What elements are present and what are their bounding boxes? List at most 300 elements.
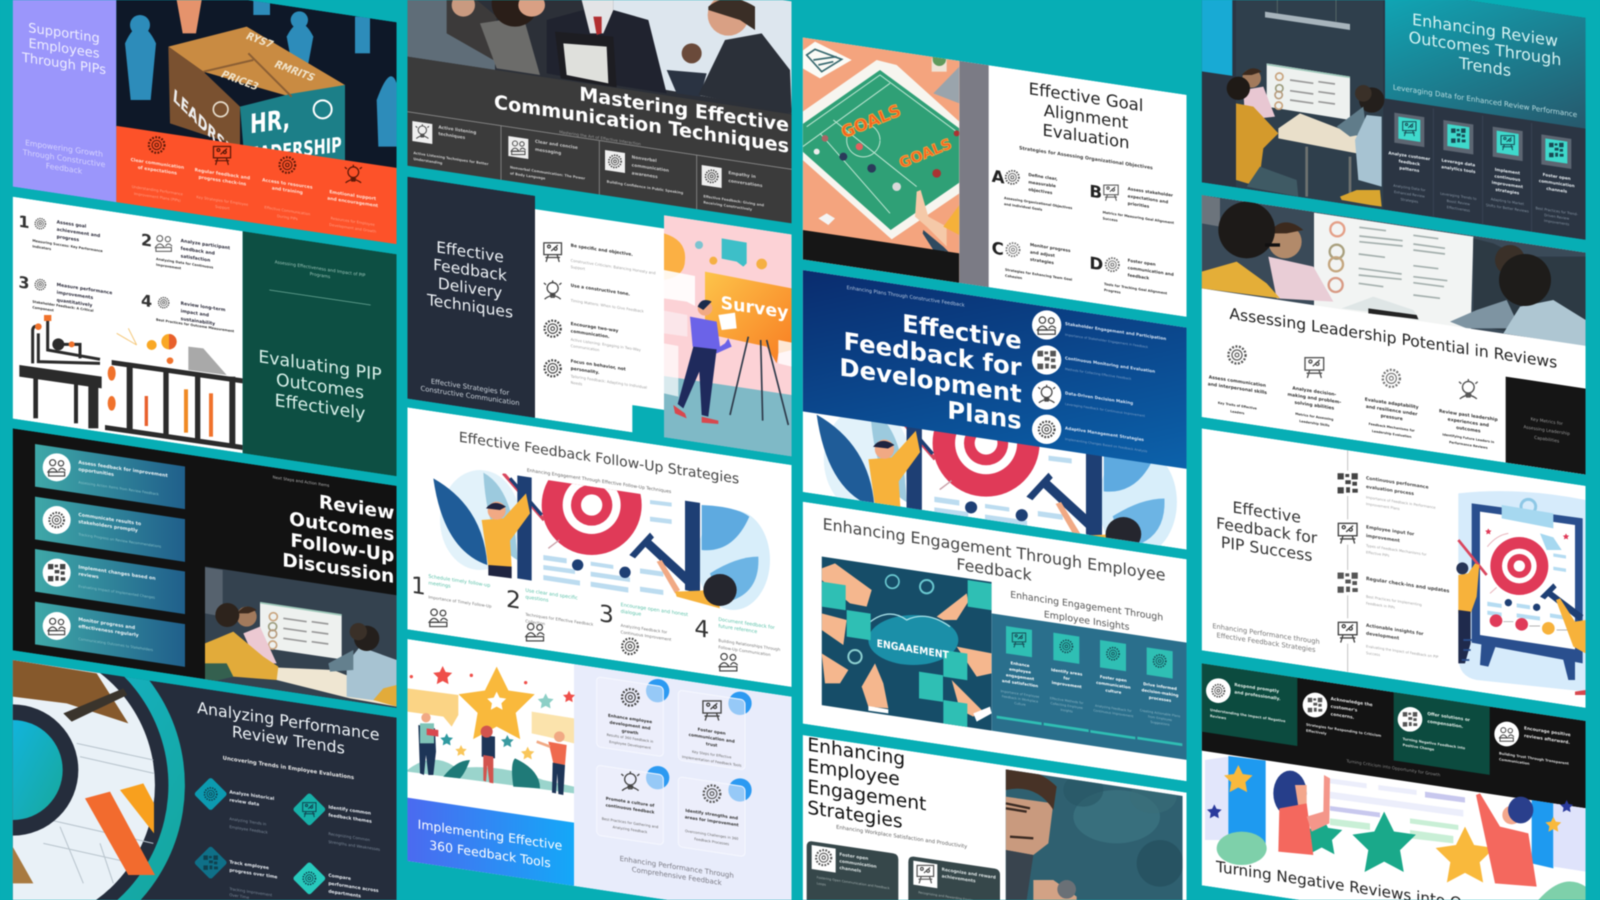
item 3: Shifts for Better Reviews [1486,203,1529,214]
item A: A [992,166,1005,188]
panel: white content [803,37,1187,317]
item 4: processes [1149,695,1172,703]
title: PIP Success [1221,533,1312,565]
slide: Enhancing Engagement Through Employee Feedback [803,502,1187,781]
item: adaptive: Adaptive Management Strategies [1065,425,1144,442]
item 3: improvements [57,290,93,301]
item: clear communication: Understanding Performance [132,185,184,197]
card 2 [1303,693,1382,744]
card 2: concerns. [1331,711,1355,721]
item A [992,166,1072,216]
metrics caption: Assessing Leadership [1523,424,1570,437]
card 1 [597,677,669,757]
item: behavior [545,358,647,396]
item 2 [1287,358,1341,428]
item 4: Building Relationships Through [718,638,781,652]
slide: Review Outcomes Follow-Up Discussion [13,428,397,709]
item 4: Drive informed [1143,681,1177,691]
item: nonverbal awareness: Nonverbal [632,154,657,164]
item 3 [599,599,688,654]
item 1 [1336,471,1436,516]
card 1: Foster open [839,852,868,862]
card 3: Analyzing Feedback [613,825,648,834]
item 3: Leadership Evaluation [1372,429,1412,439]
item 2: improvement [1052,680,1082,689]
item 3: Stakeholder Feedback: A Critical [32,300,94,313]
item 3: and resilience under [1366,404,1418,418]
item 3: pressure [1381,413,1403,422]
card 1: Results of 360 Feedback in [607,733,653,744]
item: regular feedback: Key Strategies for Employee [196,195,249,207]
card 1: Fostering Open Communication and Feedback [817,875,890,890]
card 3: compensation. [1427,719,1464,730]
card 1: Enhance employee [608,713,652,724]
item D: Tools for Tracking Goal Alignment [1104,282,1167,296]
title: Effective Feedback Follow-Up Strategies [459,430,739,488]
item: two-way: Active Listening: Engaging in Two-Way [571,338,642,352]
item 3: Continuous Improvement [1093,708,1134,718]
card 4: Communication [1499,757,1530,766]
item 4: future reference [718,623,757,635]
item: specific: Constructive Criticism: Balancing Honesty and [571,259,656,275]
title: Development [839,352,1022,409]
card 3: Best Practices for Gathering and [602,817,658,829]
item: emotional support: Resources for Employee [331,216,375,227]
item 1: feedback [1399,158,1420,167]
card 3 [597,765,669,845]
title: Evaluation [1043,121,1129,153]
slide: Mastering Effective Communication Techniques [407,0,792,224]
item 2 [1440,120,1477,214]
item: historical data: Analyze historical [229,789,275,802]
card 1: Assessing Action Items from Review Feedback [78,480,160,497]
item: emotional support: Emotional support [329,189,377,202]
item 1: Importance of Employee [1001,689,1039,699]
card 1: Understanding the Impact of Negative [1210,708,1286,723]
item: stakeholder: Stakeholder Engagement and Participation [1065,321,1166,341]
item 3 [1365,370,1419,440]
item 1: evaluation process [1366,484,1414,497]
illustration: goals field [800,33,967,300]
photo: pointing man [1003,763,1187,900]
item: specific: Be specific and objective. [571,243,633,258]
item 2: Types of Feedback Mechanisms for [1365,544,1427,557]
item 1: Indicators [32,244,51,251]
item 2: Insights [1060,708,1073,714]
item: behavior: Focus on behavior, not [571,358,626,373]
item 2: satisfaction [181,253,210,264]
item 3: Regular check-ins and updates [1366,576,1449,595]
item D: communication and [1128,265,1174,277]
item 4: 4 [141,291,152,311]
item 1: progress [57,234,79,243]
item 4: outcomes [1456,425,1481,435]
card 1: Assess feedback for improvement [78,460,168,479]
item 4 [1137,647,1182,746]
item: emotional support: Development and Growth [329,223,377,234]
title: Feedback [433,256,507,285]
title: Review Trends [232,722,345,758]
photo: chart in circle [12,659,186,900]
item: emotional support [327,165,379,234]
photo: meeting room [1227,0,1384,210]
item: nonverbal awareness: communication [632,162,669,174]
item: regular feedback: Regular feedback and [195,167,250,181]
item 2: Collecting Employee [1051,701,1083,710]
item: empathy: Effective Feedback: Giving and [703,194,764,207]
card 2: Strategies for Responding to Criticism [1306,723,1382,738]
item: clear messaging: messaging [535,147,561,157]
item: clear messaging: of Body Language [510,171,546,181]
illustration: survey: Survey [721,293,789,324]
item: track progress: Track employee [229,859,269,871]
item 2: for [1063,675,1070,681]
item 4 [694,614,781,671]
card 1 [35,444,185,509]
title: Engagement [807,777,926,815]
item 4: Creating Actionable Plans [1140,708,1181,718]
item 1: Analyze customer [1388,150,1431,162]
item 2: feedback and [181,246,215,257]
item 4: Best Practices for Trend- [1536,206,1579,217]
item C: Cohesion [1005,274,1023,280]
panel: dark content [407,57,792,224]
item 4: Suggestions [1150,720,1170,727]
subtitle: Mastering the Art of Effective Interaction [559,129,641,147]
item: compare departments [292,861,379,900]
title: Evaluating PIP [258,347,382,386]
item: data-driven: Data-Driven Decision Making [1065,390,1133,406]
item 1: Schedule timely follow-up [428,574,490,589]
item 2 [1336,519,1427,563]
title: Feedback [956,554,1032,585]
card 3: reviews [78,571,99,580]
item: clear messaging: Nonverbal Communication: The Power [510,165,585,181]
item 3: Analyzing Feedback for [1095,704,1132,713]
card 3: Promote a culture of [606,796,654,808]
card 2 [678,690,752,770]
item B: Metrics for Measuring Goal Alignment [1103,210,1174,225]
item: regular feedback [195,146,250,214]
item 4: Identifying Future Leaders in [1442,432,1495,444]
item: regular feedback: Support [215,205,230,211]
item 4: Review past leadership [1439,408,1498,423]
subtitle: Constructive Communication [420,385,520,407]
slide: Analyzing Performance Review Trends [12,659,398,900]
item A: Assessing Organizational Objectives [1004,196,1072,210]
card 2: Tracking Progress on Review Recommendations [77,532,161,549]
item 3 [18,275,113,312]
title: Effective [1232,498,1301,527]
item 4: experiences and [1448,417,1489,429]
subtitle: Through Constructive [22,148,106,169]
item: active listening: Active Listening Techniques for Better [413,151,489,166]
metrics caption: Key Metrics for [1531,416,1563,427]
item 3: communication [1096,680,1131,690]
item C: Strategies for Enhancing Team Goal [1005,268,1072,282]
panel: white lower cover [1202,288,1586,475]
item: clear communication: Improvement Plans (PIPs) [134,192,181,203]
item 2: questions [525,594,549,604]
item: historical data: Employee Feedback [229,824,268,835]
item: common themes: Strengths and Weaknesses [328,839,380,852]
item C: Monitor progress [1030,242,1071,253]
item 4: decision-making [1142,687,1179,698]
item D: Progress [1104,288,1121,294]
panel: white list [535,209,664,437]
item: two-way: Encourage two-way [571,321,618,334]
item 1: Leaders [1230,409,1244,415]
slide: Effective Goal Alignment Evaluation [800,33,1187,317]
item 3: culture [1105,687,1122,695]
item 2: Collection [525,618,546,626]
item 2: Analyzing Data for Continuous [156,257,213,270]
item 3 [1090,640,1135,739]
card 1: channels [839,865,861,874]
panel: white content [13,197,243,453]
panel: dark background [1202,0,1586,240]
item: access to resources: and training [272,185,303,196]
title: Employees [28,36,100,62]
slide: Enhancing Review Outcomes Through Trends [1202,0,1586,240]
item: active listening: Active listening [438,124,476,136]
item: clear communication: Clear communication [131,157,184,171]
item: tone: Use a constructive tone. [571,283,630,298]
card 4: Monitor progress and [78,617,135,631]
item A: objectives [1028,187,1053,195]
card 1: opportunities [78,467,114,478]
item 1: and interpersonal skills [1208,381,1267,396]
item 4 [1536,134,1579,228]
item 4: Evaluating the Impact of Feedback on PIP [1366,644,1438,659]
item 1: Key Traits of Effective [1218,401,1257,411]
item 1: 1 [18,212,29,232]
item 4: Review long-term [181,301,226,313]
item: historical data: review data [229,797,259,808]
card 2: Acknowledge the [1331,696,1373,708]
item 1: Improvement Plans [1366,502,1400,511]
title: Delivery [438,275,502,302]
item 3: 3 [18,272,29,293]
item 4 [141,291,234,333]
card 4 [678,777,752,857]
card 2 [35,497,185,562]
item 2: Leverage data [1441,157,1475,168]
slide: Supporting Employees Through PIPs [13,0,397,244]
item: data-driven [1032,380,1146,418]
card 4: Communicating Outcomes to Stakeholders [78,637,153,652]
card 4: Feedback Processes [694,837,729,846]
item 2: Leveraging Trends to [1440,192,1477,201]
card 2: trust [706,741,717,748]
item 4: Document feedback for [718,617,775,631]
photo: HR blocks: PRICE3 [218,70,261,93]
item 4: Performance Reviews [1449,440,1488,450]
item 4: Success [1366,651,1380,657]
item 4: Actionable insights for [1366,623,1424,637]
item 2: 2 [141,230,152,251]
item 4: development [1366,631,1400,642]
item 1: Importance of Feedback in Performance [1366,495,1436,510]
item: common themes: Recognizing Common [328,831,370,842]
subtitle: Enhancing Engagement Through Effective Follow-Up Techniques [527,468,672,495]
item: empathy: conversations [728,178,763,189]
card 1: Reviews [1210,714,1226,720]
card 1: and professionally. [1234,689,1281,702]
item C [992,237,1072,288]
card 1: communication [839,858,877,870]
item 3: Component [32,305,54,313]
card 3: Offer solutions or [1427,711,1471,724]
panel: white lower [803,270,1187,550]
card 2: customer's [1331,704,1358,714]
item 1: Culture [1014,701,1026,707]
item: specific: Support [571,265,586,271]
subtitle: Strategies for Assessing Organizational Objectives [1019,145,1153,171]
item 3: Analyzing Feedback for [621,623,668,635]
item: clear communication [131,137,184,203]
panel: blue upper [803,270,1187,469]
card 2: Implementation of Feedback Tools [682,755,742,768]
item: common themes: Identify common [328,804,371,817]
item: empathy: Empathy in [728,170,756,180]
card 1: Loops [817,881,826,887]
card 4: reviews afterward. [1524,733,1570,746]
illustration: desk and rack [19,315,243,450]
item: monitoring [1032,345,1155,381]
item 3: Evaluate adaptability [1365,397,1419,411]
title: Outcomes [276,370,364,404]
item B: expectations and [1128,193,1168,204]
item 4: Follow-Up Communication [718,644,771,657]
item: tone [544,280,645,314]
item B [1089,181,1174,231]
item D: D [1089,252,1103,274]
card 3: continuous feedback [606,802,655,815]
item 2: Analyze decision- [1292,385,1336,398]
metrics caption: Capabilities [1534,435,1560,445]
item: clear communication: of expectations [138,165,177,177]
item: track progress: progress over time [229,867,277,881]
photo: HR blocks [116,0,397,169]
item A: measurable [1028,179,1056,188]
panel: gray strip [959,61,989,287]
item: adaptive [1032,415,1148,453]
item: compare departments: departments [328,889,361,900]
panel: white background [1202,428,1586,708]
card 1 [807,841,898,900]
card 3: Turning Negative Feedback into [1403,737,1466,750]
title: Employee [807,756,900,791]
item 1: Feedback in Workplace [1002,694,1038,704]
item 1: Enhanced Review [1394,190,1425,199]
item: track progress: Over Time [229,892,250,900]
item 1: Importance of Timely Follow-Up [428,594,492,609]
illustration: stars and people [407,666,575,795]
card 4: Encourage positive [1524,725,1571,738]
item 3: 3 [599,599,614,629]
title: Communication Techniques [494,91,789,158]
card 2 [908,857,1000,900]
title: Strategies [807,798,903,833]
subtitle: Effective Strategies for [431,377,509,397]
item: historical data [194,777,275,835]
slide: Turning Negative Reviews into Opportunities [1202,663,1586,900]
title: Discussion [282,550,394,588]
card 4: Overcoming Challenges in 360 [685,829,738,841]
title: Analyzing Performance [197,698,379,744]
item A: and Individual Goals [1004,202,1042,212]
item: nonverbal awareness: awareness [632,170,658,180]
item 2 [506,585,594,641]
title: Review [319,492,394,524]
item 2: Effective Methods for [1050,696,1084,705]
photo: award ceremony [407,0,792,116]
subtitle: Effective Feedback Strategies [1217,631,1316,654]
slide: Effective Feedback Delivery Techniques [407,177,792,467]
item: active listening: Understanding [413,157,443,165]
item: access to resources: Access to resources [262,177,313,191]
title: Through PIPs [21,51,106,78]
item 2: improvement [1366,533,1401,544]
footer subtitle: Enhancing Performance Through [620,854,734,880]
card 2: communication and [689,732,735,744]
footer subtitle: Comprehensive Feedback [632,865,723,887]
item 1: Strategies [1400,197,1418,204]
item: stakeholder [1032,310,1166,349]
item 3: dialogue [621,609,641,618]
photo: HR blocks: LEADERSHIP [240,133,342,169]
panel: lilac title panel [13,0,116,202]
title: Outcomes Through [1409,28,1561,69]
panel: white background [803,735,1187,900]
item 4: communication [1539,178,1575,188]
subtitle: Enhancing Workplace Satisfaction and Productivity [836,825,967,850]
item: compare departments: Compare [328,873,351,882]
item: two-way [545,321,642,359]
panel: white background [1202,195,1586,475]
item 3: Adapting to Market [1491,197,1525,206]
card 4: areas for improvement [685,814,739,827]
item 1: 1 [411,571,426,601]
title: Techniques [426,291,513,322]
card 2: Communicate results to [78,512,142,528]
panel: navy background [140,680,398,900]
card 3 [35,549,185,614]
subtitle: Feedback [46,161,83,176]
title: 360 Feedback Tools [429,837,551,870]
item: data-driven: Leveraging Feedback for Continuous Improvement [1065,402,1146,418]
subheading: Employee Insights [1044,609,1130,633]
item: tone: Timing Matters: When to Give Feedback [570,299,645,314]
item 1: employee [1009,666,1031,675]
photo: meeting [205,567,397,709]
item 3: Encourage open and honest [621,602,688,618]
item 1: Enhance [1010,660,1030,668]
item 3: Best Practices for Implementing [1366,595,1422,607]
card 4: Building Trust Through Transparent [1499,751,1569,766]
item: adaptive: Implementing Changes Based on Feedback Analysis [1065,437,1148,453]
panel: black background [13,428,397,708]
card 1 [1202,663,1297,746]
item 1: Measuring Success: Key Performance [32,239,103,253]
item 4: from Employee [1148,715,1172,722]
item 3: Measure performance [57,282,112,296]
item: access to resources: Effective Communication [264,206,311,217]
photo: HR blocks: LEADRSH [172,85,235,165]
item 2: Metrics for Assessing [1295,412,1333,422]
photo: meeting close-up [1202,195,1586,347]
